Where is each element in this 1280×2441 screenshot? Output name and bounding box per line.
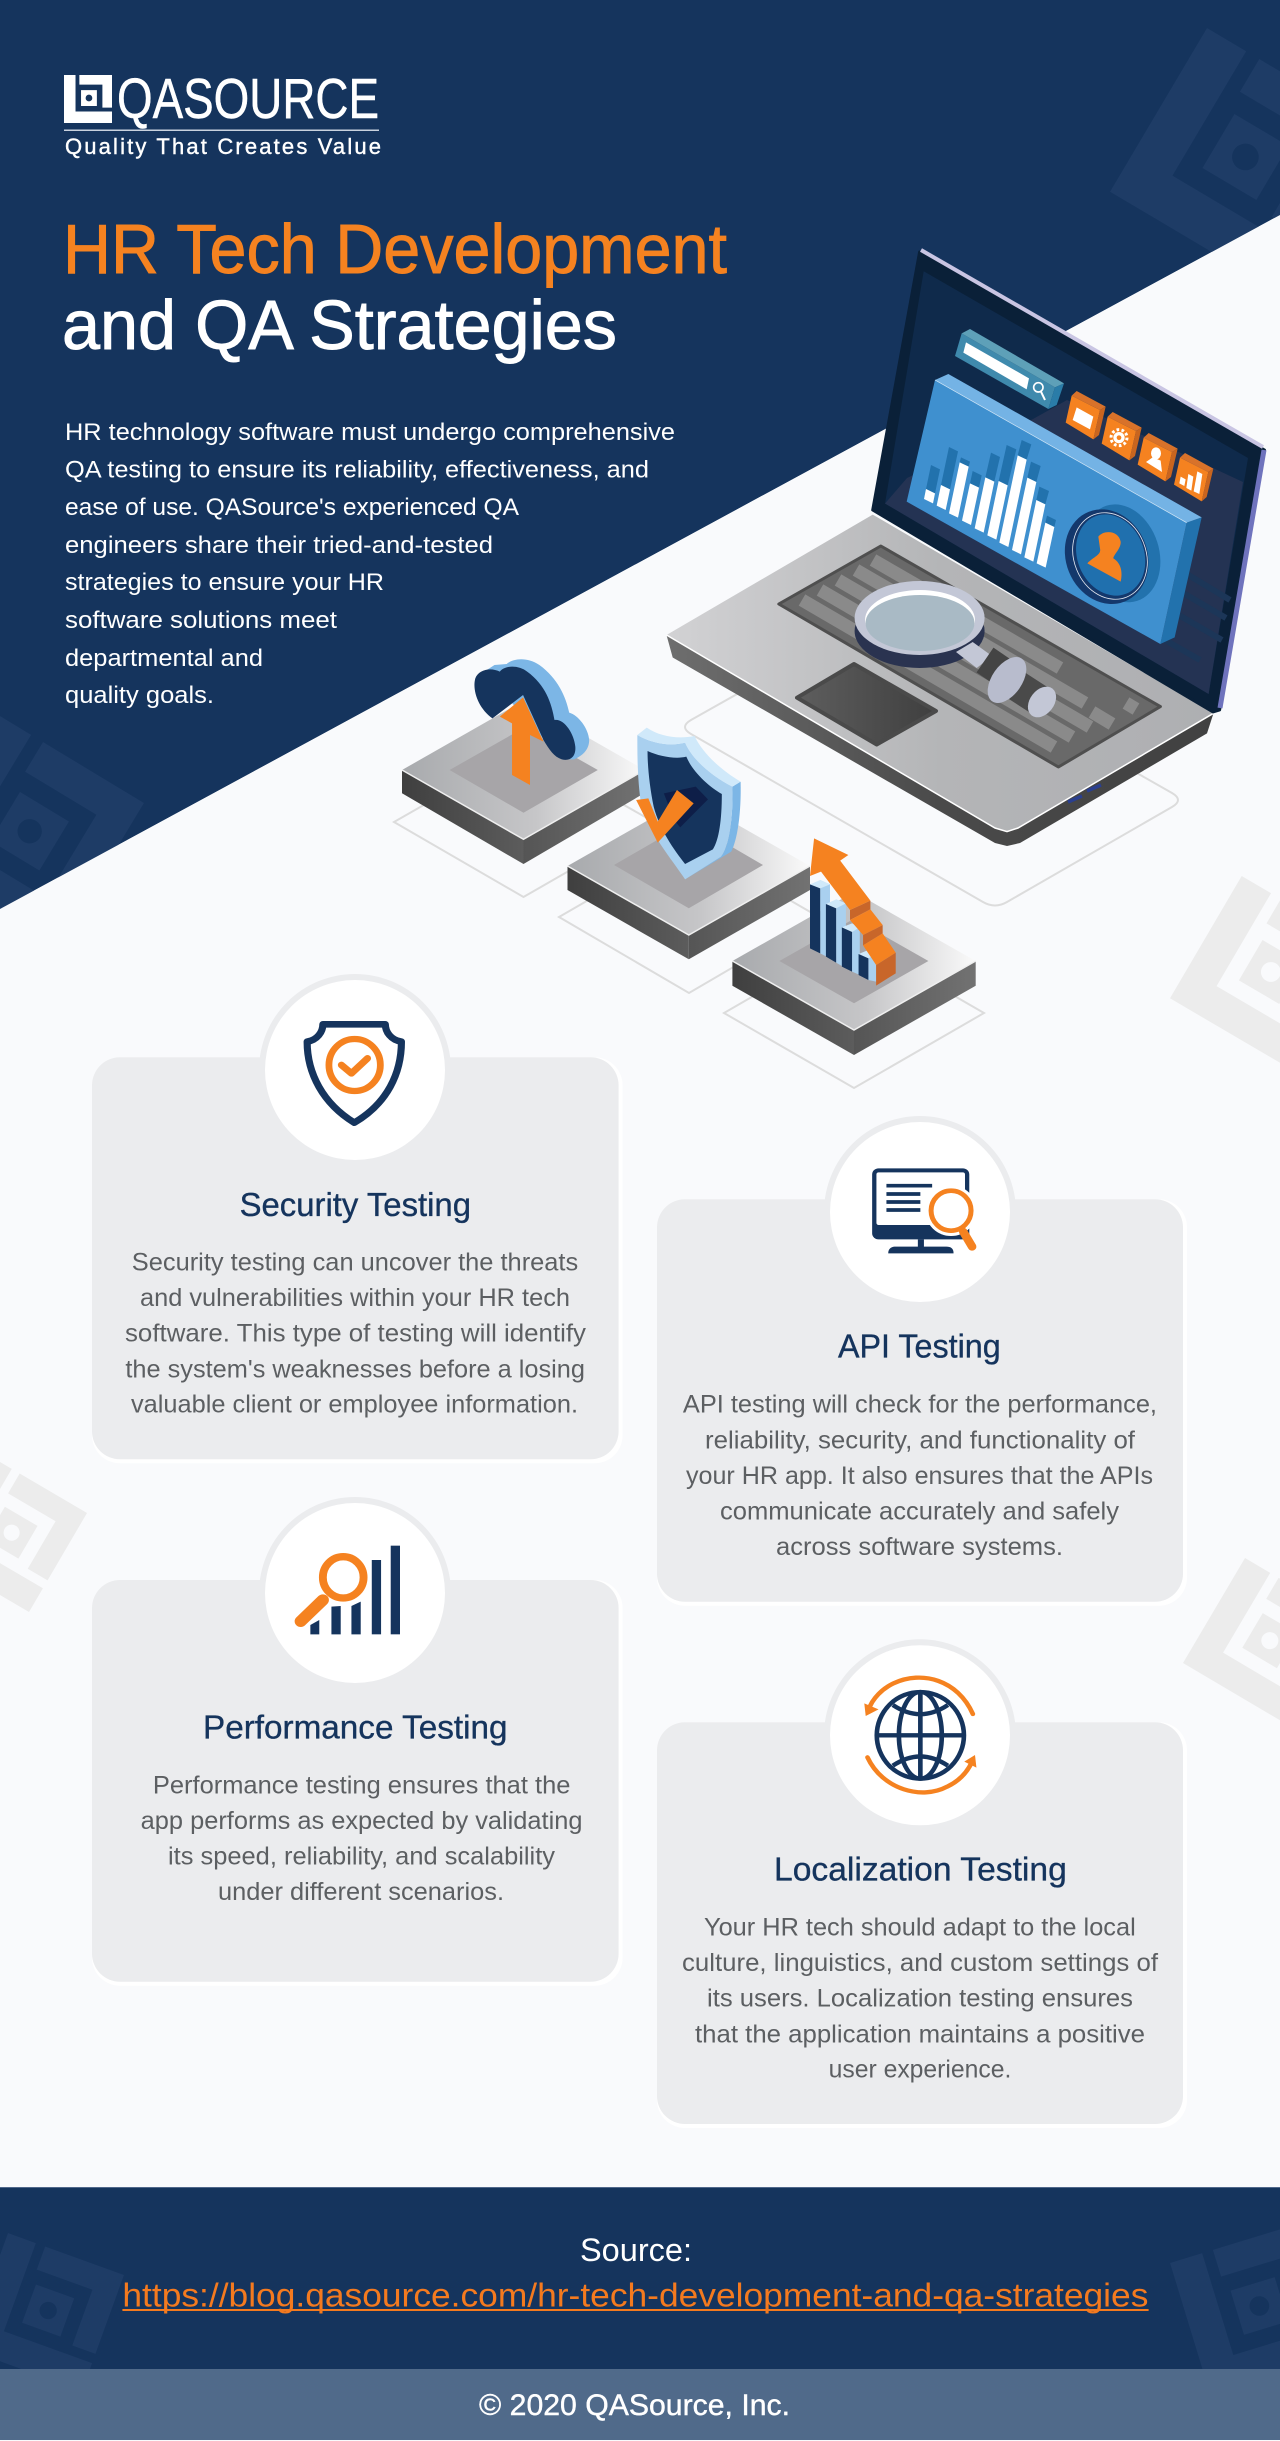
logo mark [64,75,112,123]
footer: copyright band: © 2020 QASource, Inc. [479,2389,790,2422]
floor outline plates [394,624,1178,1088]
heading: Localization Testing [774,1851,1067,1888]
intro paragraph: QA testing to ensure its reliability, effectiveness, and [65,456,649,484]
panel: security testing [92,974,623,1463]
title: HR Tech Development [63,210,727,288]
illustration: platform with cloud upload [402,659,645,864]
icon: security shield [307,1024,401,1123]
heading: Security Testing [240,1186,471,1223]
panel: API testing [657,1116,1187,1606]
illustration: laptop [666,250,1264,846]
description: Your HR tech should adapt to the local [704,1913,1136,1941]
description: under different scenarios. [218,1878,504,1906]
intro paragraph [65,419,675,709]
intro paragraph: strategies to ensure your HR [65,569,384,596]
intro paragraph: software solutions meet [65,607,337,634]
intro paragraph: engineers share their tried-and-tested [65,532,493,559]
user profile dial [1051,494,1173,617]
description: Security testing can uncover the threats [132,1249,578,1277]
description: API testing will check for the performance, [683,1391,1157,1419]
logo tagline: Quality That Creates Value [65,134,381,159]
intro paragraph: departmental and [65,645,263,672]
title: and QA Strategies [62,286,617,364]
description: user experience. [829,2056,1011,2084]
icon: globe with arrows [864,1678,976,1792]
source label: Source: [580,2232,692,2268]
intro paragraph: quality goals. [65,682,214,709]
icon: bars with rising arrow [810,838,896,986]
description: software. This type of testing will identify [125,1320,587,1348]
description [682,1913,1158,2084]
illustration: platform with shield [568,728,810,959]
illustration: platform with growth chart [732,838,976,1055]
logo wordmark: QASOURCE [117,67,379,131]
panel: localization testing [657,1639,1187,2128]
laptop base side [666,635,1214,846]
source link: https://blog.qasource.com/hr-tech-development-and-qa-strategies [122,2277,1148,2314]
panel: performance testing [92,1497,623,1986]
bar chart on screen [924,440,1056,568]
QASource logo [64,67,381,159]
blue dashboard panel [907,374,1202,644]
description: its users. Localization testing ensures [707,1985,1133,2013]
description: that the application maintains a positive [695,2020,1145,2048]
watermark: top right [1110,28,1280,289]
description [683,1391,1157,1561]
search bar [955,329,1064,409]
description: its speed, reliability, and scalability [168,1843,556,1871]
description: across software systems. [776,1533,1063,1561]
laptop ports [1068,785,1101,802]
laptop screen [873,250,1264,712]
icon: shield with check [636,728,741,879]
heading: Performance Testing [203,1708,508,1745]
title [62,210,727,364]
icon: monitor with magnifier [872,1168,977,1253]
description: app performs as expected by validating [141,1807,582,1835]
intro paragraph: ease of use. QASource's experienced QA [65,494,520,521]
watermark: footer left [0,2234,124,2369]
icon: bar chart with magnifier [301,1546,400,1634]
watermark: lower left of header [0,713,144,952]
keyboard [779,546,1160,767]
footer: source band [0,2187,1280,2369]
description: the system's weaknesses before a losing [125,1355,585,1383]
screen contents [907,329,1213,644]
heading: API Testing [838,1328,1001,1365]
description: your HR app. It also ensures that the APIs [686,1462,1153,1490]
description [141,1771,582,1906]
orange app tiles [1066,391,1213,501]
description: and vulnerabilities within your HR tech [140,1284,570,1312]
description: valuable client or employee information. [131,1391,578,1419]
description: communicate accurately and safely [720,1497,1120,1525]
description: culture, linguistics, and custom settings of [682,1949,1158,1977]
diagonal page-colour mask [0,215,1280,1000]
footer: copyright band [0,2369,1280,2440]
description: Performance testing ensures that the [153,1771,570,1799]
watermark: footer right [1170,2230,1280,2369]
trackpad [797,664,936,744]
description [125,1249,587,1419]
header navy background with diagonal edge [0,0,1280,1000]
magnifying glass [855,581,1062,723]
intro paragraph: HR technology software must undergo comprehensive [65,419,675,446]
description: reliability, security, and functionality of [705,1426,1135,1454]
icon: cloud and arrow [474,659,589,785]
laptop deck [666,515,1214,832]
background watermarks on light area [0,876,1280,1725]
